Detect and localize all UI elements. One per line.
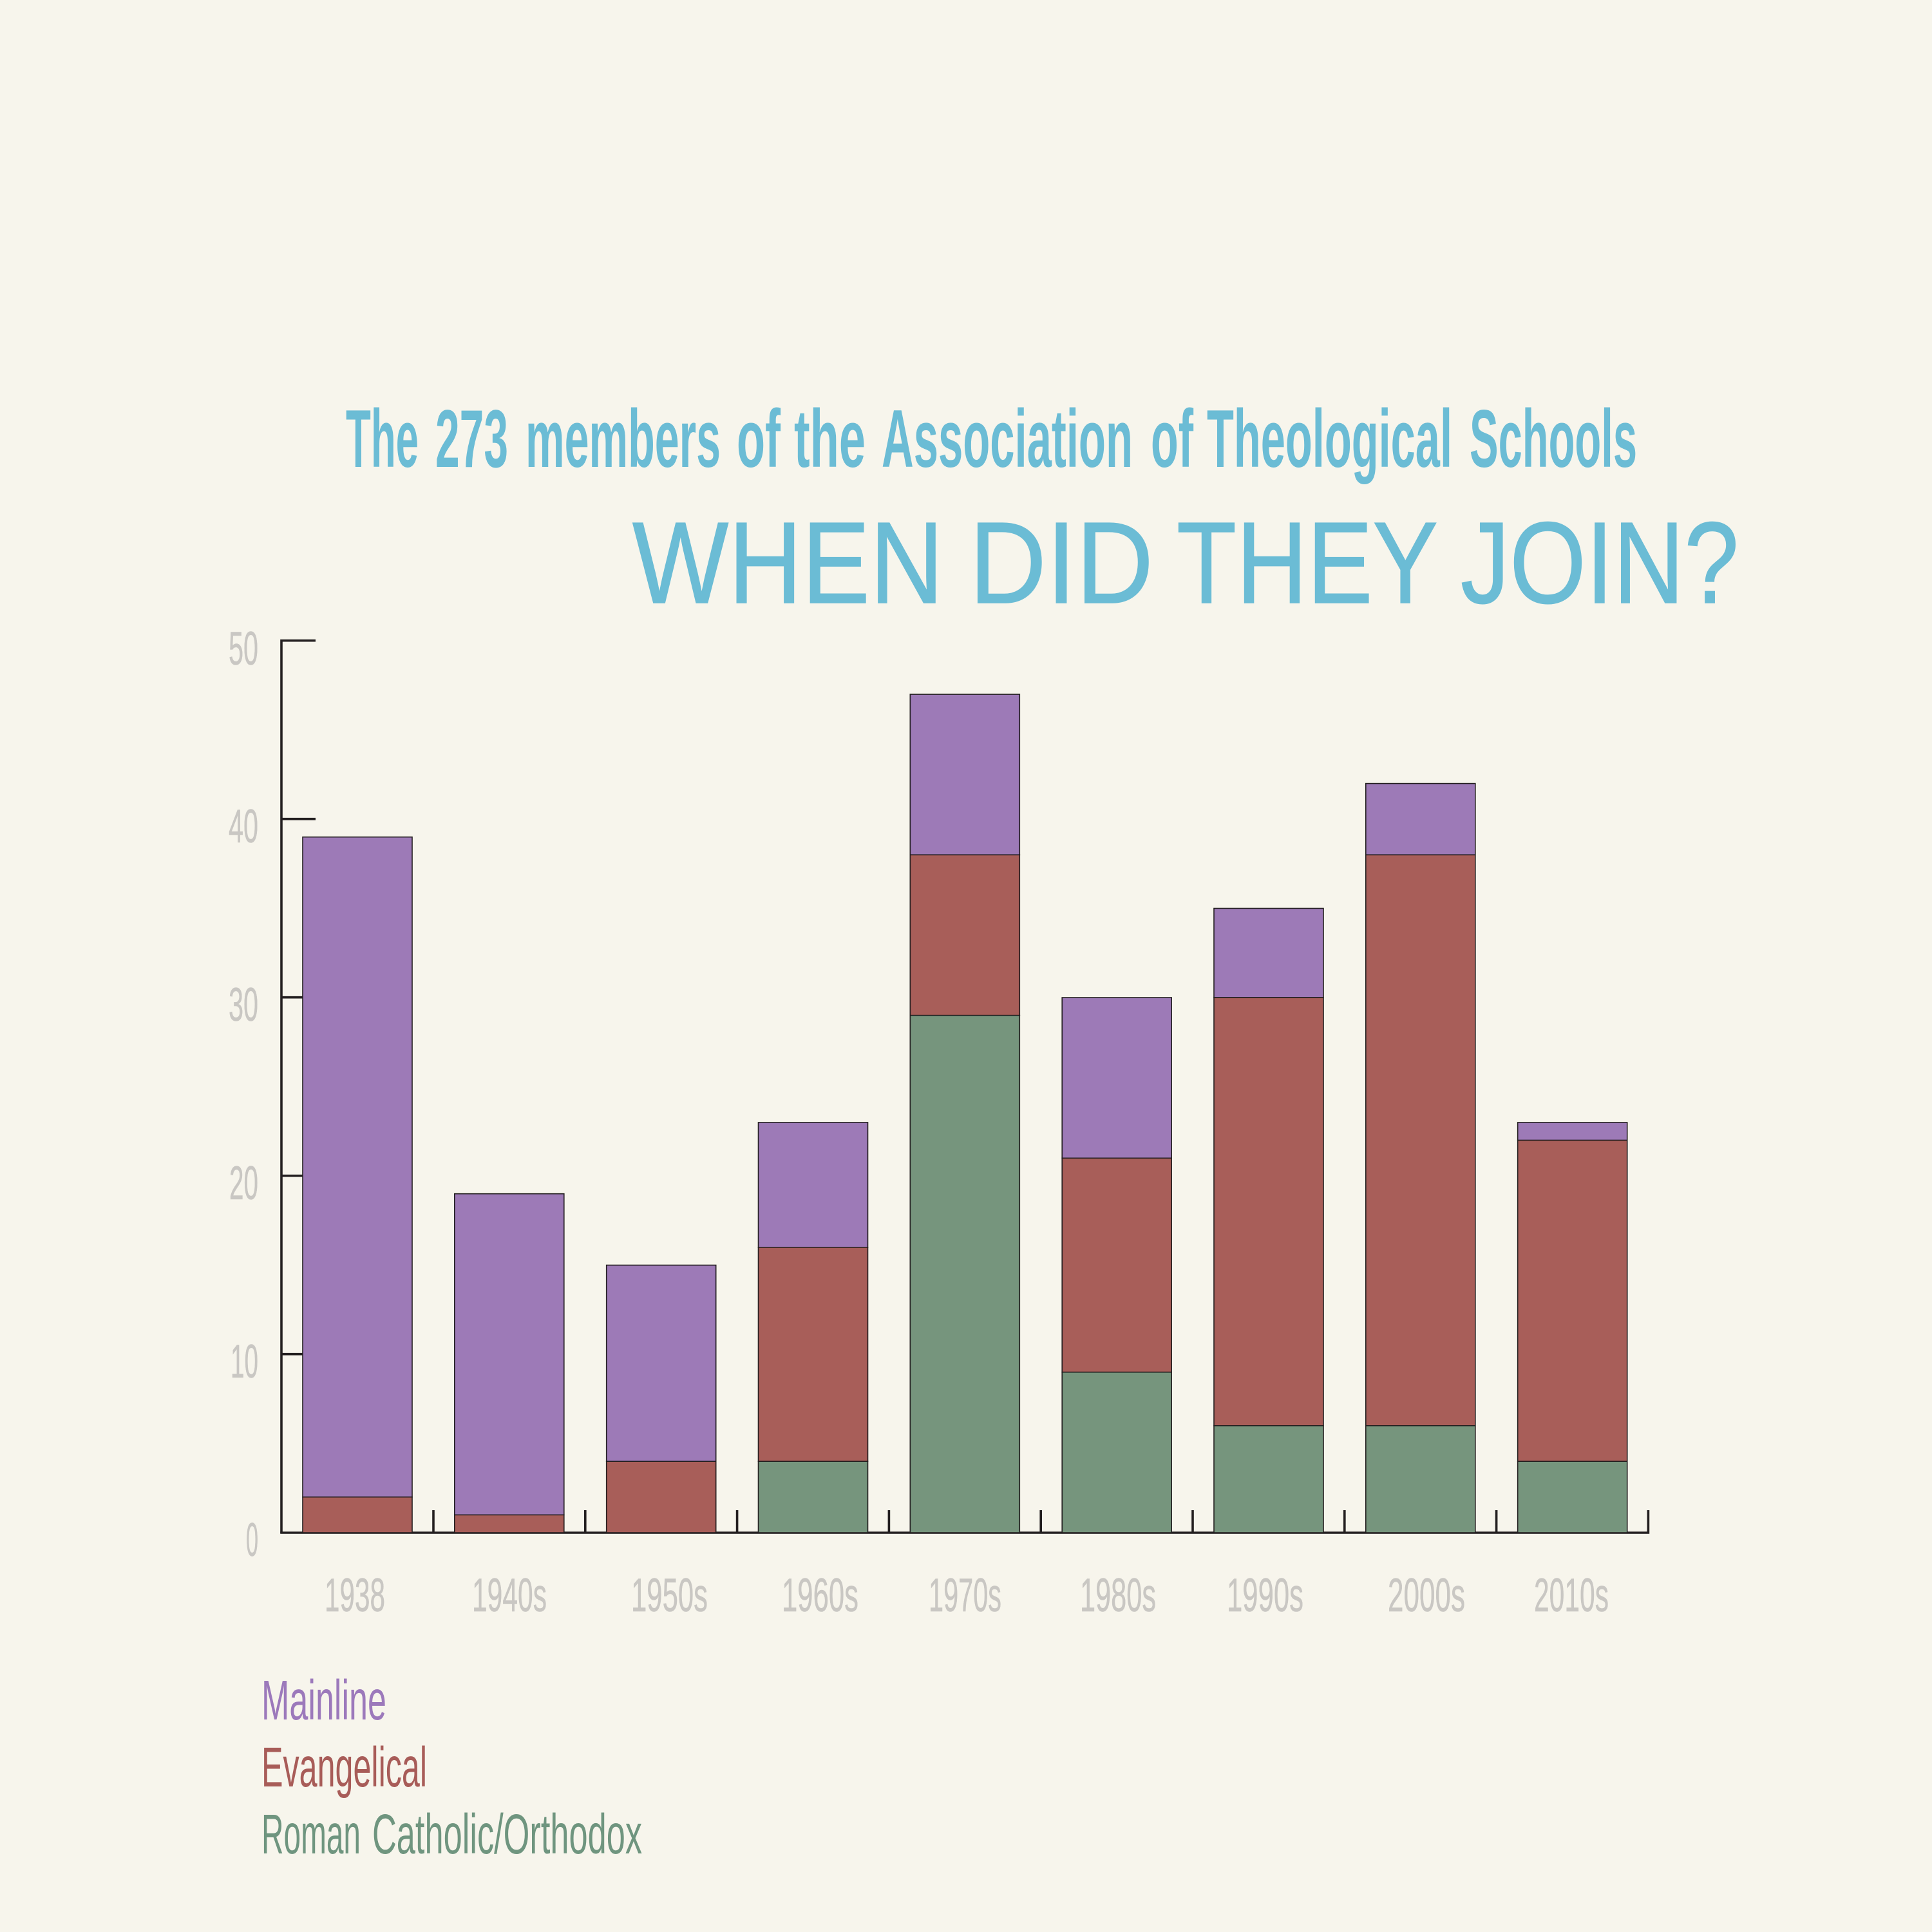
text: 0: [246, 1514, 258, 1566]
subtitle: 273: [435, 393, 508, 484]
subtitle: Theological: [1207, 393, 1452, 484]
subtitle: The: [346, 393, 419, 484]
bar: 1938: [303, 837, 412, 1533]
x axis labels: 1970s: [929, 1569, 1001, 1622]
bar: 1980s: [1062, 998, 1171, 1533]
x axis labels: 1990s: [1227, 1569, 1303, 1622]
y axis labels: 40: [229, 800, 258, 853]
legend: evangelical: Evangelical: [261, 1736, 427, 1799]
subtitle: of: [1151, 393, 1193, 484]
x axis labels: 1960s: [782, 1569, 858, 1622]
subtitle: Association: [882, 393, 1133, 484]
title: [632, 498, 1739, 628]
x axis labels: 1938: [325, 1569, 385, 1622]
x axis labels: 1940s: [472, 1569, 547, 1622]
subtitle: members: [526, 393, 721, 484]
subtitle: the: [794, 393, 866, 484]
x axis labels: [325, 1569, 1609, 1622]
subtitle: [346, 393, 1637, 484]
legend: roman catholic/orthodox: [261, 1803, 642, 1866]
y axis labels: 10: [231, 1336, 258, 1388]
legend: roman catholic/orthodox: Roman: [261, 1803, 361, 1866]
x axis labels: 2010s: [1534, 1569, 1609, 1622]
title: DID: [969, 498, 1153, 628]
y axis labels: 50: [229, 623, 258, 675]
bar: 1960s: [759, 1122, 868, 1533]
y axis labels: 30: [229, 979, 258, 1031]
bar: 1970s: [910, 694, 1019, 1533]
bar: 1940s: [455, 1194, 564, 1533]
subtitle: of: [737, 393, 781, 484]
bar: 2000s: [1366, 784, 1475, 1533]
bar: 1950s: [607, 1265, 716, 1533]
x axis labels: 1980s: [1080, 1569, 1156, 1622]
title: THEY: [1177, 498, 1438, 628]
y axis with ticks: [280, 641, 316, 1533]
y axis labels: [229, 623, 258, 1566]
x axis labels: 2000s: [1388, 1569, 1465, 1622]
title: WHEN: [632, 498, 943, 628]
subtitle: Schools: [1470, 393, 1637, 484]
legend: roman catholic/orthodox: Catholic/Orthodox: [372, 1803, 642, 1866]
bar: 2010s: [1518, 1122, 1627, 1533]
x axis with ticks: [280, 1510, 1649, 1534]
x axis labels: 1950s: [631, 1569, 708, 1622]
bar: 1990s: [1214, 908, 1323, 1533]
legend: mainline: Mainline: [261, 1669, 386, 1732]
y axis labels: 20: [229, 1157, 258, 1209]
title: JOIN?: [1461, 498, 1739, 628]
